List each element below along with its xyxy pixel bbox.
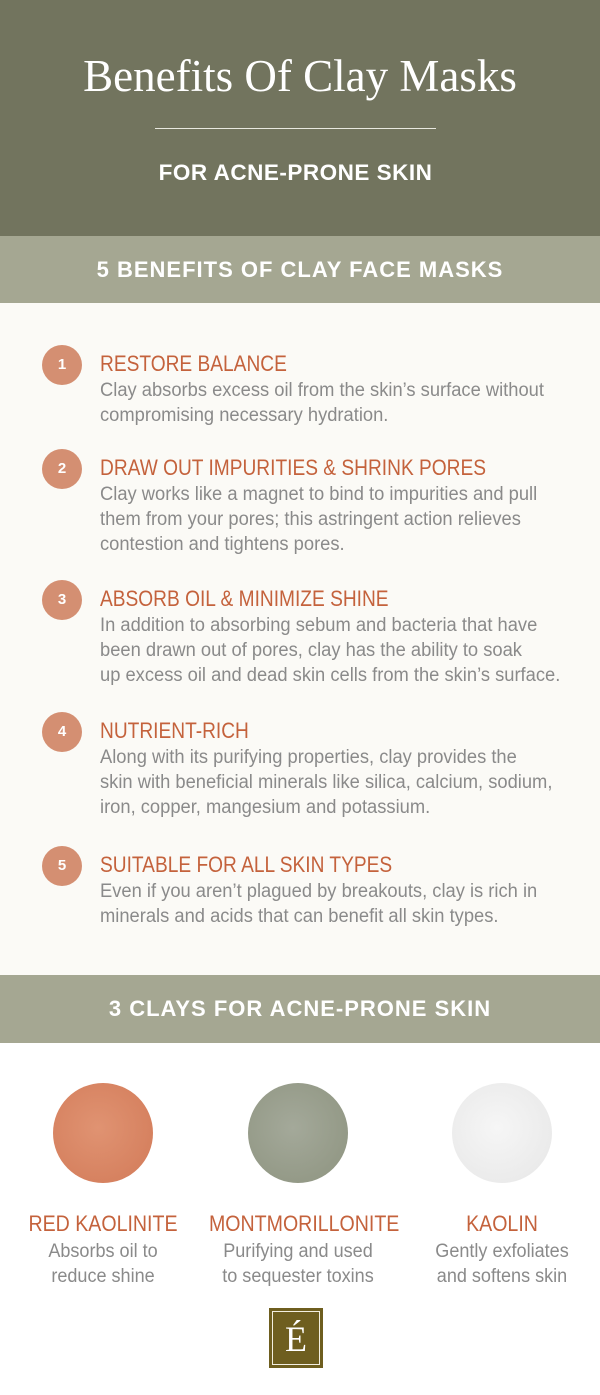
item 5: 5: [58, 857, 66, 874]
item 4: iron, copper, mangesium and potassium.: [100, 797, 430, 818]
item 3: In addition to absorbing sebum and bacteria that have: [100, 615, 537, 636]
icon: green clay: [248, 1083, 348, 1183]
band: 3 clays: 3 CLAYS FOR ACNE-PRONE SKIN: [109, 996, 491, 1021]
item 5: Even if you aren’t plagued by breakouts, clay is rich in: [100, 881, 537, 902]
item 2: them from your pores; this astringent action relieves: [100, 509, 521, 530]
clay: red kaolinite: RED KAOLINITE: [28, 1211, 178, 1236]
band: 5 benefits: 5 BENEFITS OF CLAY FACE MASKS: [97, 257, 503, 282]
clay: kaolin: and softens skin: [437, 1266, 567, 1287]
header: [0, 0, 600, 236]
title: Benefits Of Clay Masks: [83, 51, 517, 101]
item 4: 4: [58, 723, 66, 740]
clay: red kaolinite: reduce shine: [51, 1266, 155, 1287]
clay: red kaolinite: [28, 1083, 178, 1287]
item 1: [42, 345, 544, 426]
icon: red clay: [53, 1083, 153, 1183]
item 5: [42, 846, 537, 927]
subtitle: FOR ACNE-PRONE SKIN: [159, 160, 432, 185]
item 1: compromising necessary hydration.: [100, 405, 388, 426]
item 3: ABSORB OIL & MINIMIZE SHINE: [100, 586, 389, 611]
item 2: Clay works like a magnet to bind to impurities and pull: [100, 484, 537, 505]
clay: montmorillonite: Purifying and used: [223, 1241, 373, 1262]
item 2: 2: [58, 460, 66, 477]
band: 5 benefits: [0, 236, 600, 303]
icon: white clay: [452, 1083, 552, 1183]
panel: benefits: [0, 303, 600, 975]
item 1: RESTORE BALANCE: [100, 351, 287, 376]
clay: montmorillonite: [209, 1083, 399, 1287]
clay: kaolin: KAOLIN: [466, 1211, 538, 1236]
item 3: 3: [58, 591, 66, 608]
item 2: [42, 449, 537, 555]
item 1: 1: [58, 356, 66, 373]
item 5: minerals and acids that can benefit all skin types.: [100, 906, 498, 927]
band: 3 clays: [0, 975, 600, 1043]
logo: [269, 1308, 323, 1368]
item 3: [42, 580, 560, 686]
item 2: contestion and tightens pores.: [100, 534, 345, 555]
item 4: NUTRIENT-RICH: [100, 718, 249, 743]
item 3: up excess oil and dead skin cells from the skin’s surface.: [100, 665, 560, 686]
item 4: [42, 712, 552, 818]
clay: red kaolinite: Absorbs oil to: [48, 1241, 158, 1262]
clay: kaolin: Gently exfoliates: [435, 1241, 569, 1262]
item 2: DRAW OUT IMPURITIES & SHRINK PORES: [100, 455, 486, 480]
logo: É: [285, 1319, 307, 1359]
item 1: Clay absorbs excess oil from the skin’s surface without: [100, 380, 544, 401]
item 4: skin with beneficial minerals like silica, calcium, sodium,: [100, 772, 552, 793]
item 5: SUITABLE FOR ALL SKIN TYPES: [100, 852, 392, 877]
clay: kaolin: [435, 1083, 569, 1287]
clay: montmorillonite: MONTMORILLONITE: [209, 1211, 399, 1236]
item 3: been drawn out of pores, clay has the ability to soak: [100, 640, 522, 661]
item 4: Along with its purifying properties, clay provides the: [100, 747, 517, 768]
clay: montmorillonite: to sequester toxins: [222, 1266, 374, 1287]
